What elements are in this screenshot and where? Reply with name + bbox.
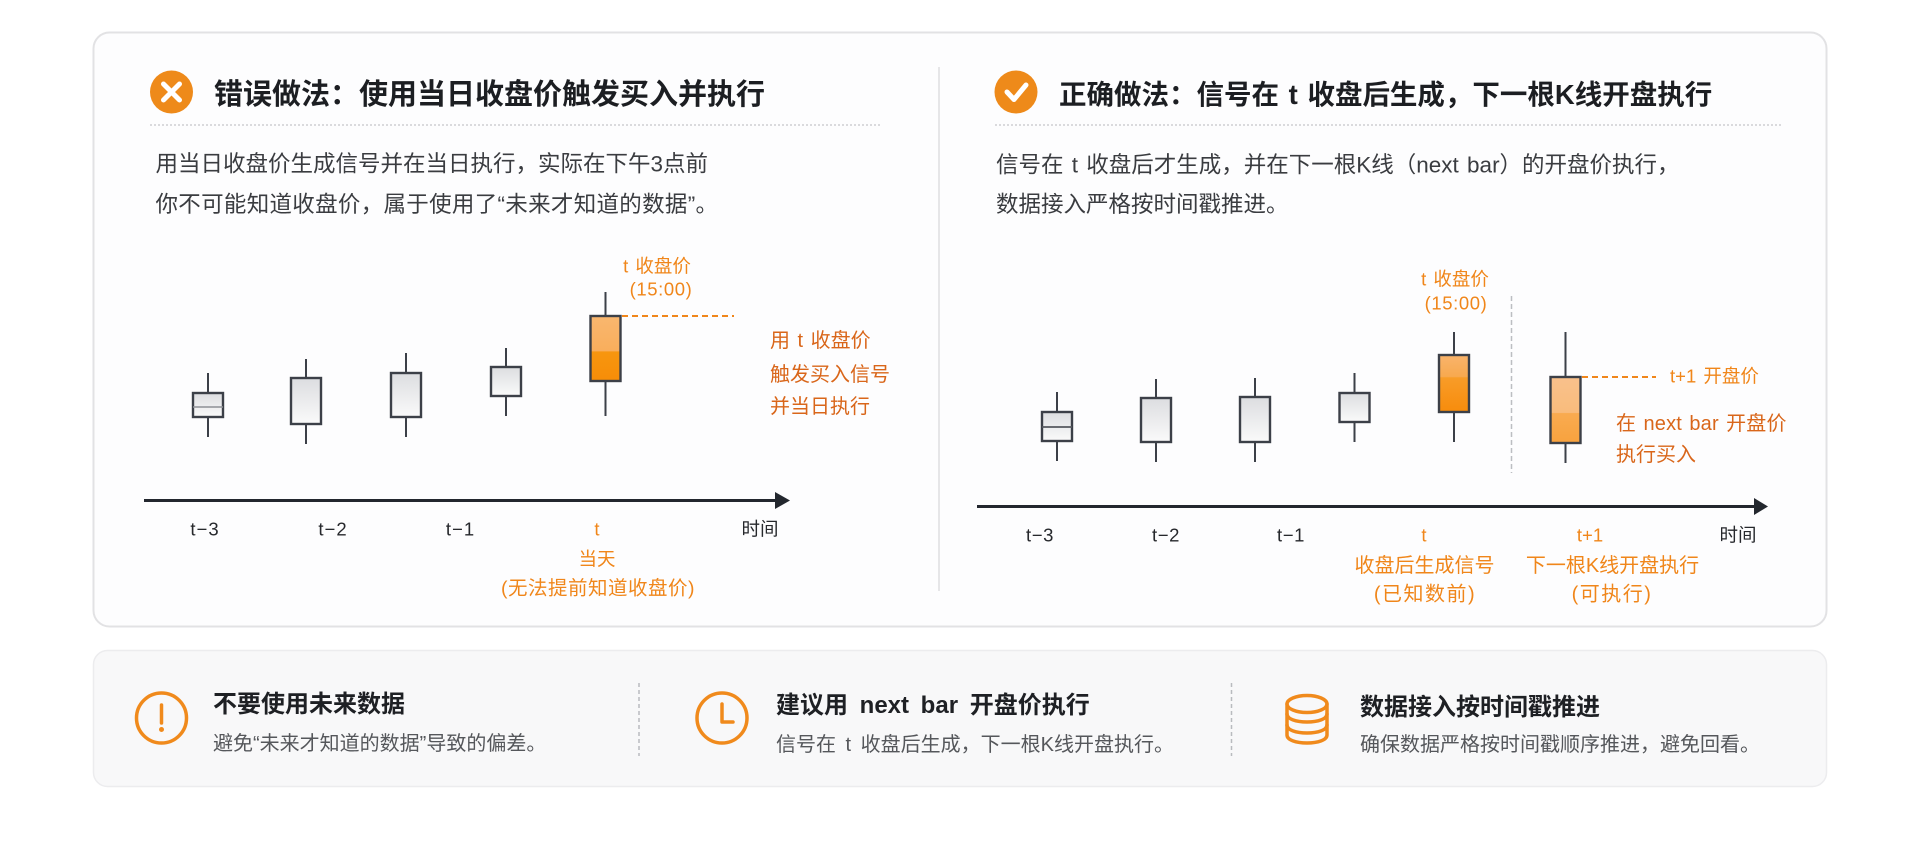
callout: next bar execution: 执行买入 <box>1616 443 1696 466</box>
close price guide <box>622 315 734 317</box>
callout: buy signal: 触发买入信号 <box>770 363 890 386</box>
axis labels: t−1 <box>446 518 475 540</box>
open price guide <box>1582 376 1656 378</box>
icon: warning <box>136 693 186 743</box>
arrow: time axis <box>977 498 1768 515</box>
text block: correct approach description: 信号在 t 收盘后才生成，并在下一根K线（next bar）的开盘价执行， <box>996 152 1680 178</box>
axis labels: t <box>1421 524 1427 546</box>
callout: buy signal: 用 t 收盘价 <box>770 329 871 352</box>
panel: recommendations <box>94 650 1826 786</box>
item: no future data <box>136 691 546 755</box>
text block: wrong approach description: 你不可能知道收盘价，属于使用了“未来才知道的数据”。 <box>156 192 718 217</box>
text block: wrong approach description: 用当日收盘价生成信号并在当日执行，实际在下午3点前 <box>156 152 708 176</box>
callout: buy signal <box>770 329 890 418</box>
description: 确保数据严格按时间戳顺序推进，避免回看。 <box>1360 733 1760 756</box>
axis labels: t+1 <box>1577 524 1603 546</box>
panel: wrong approach <box>144 70 890 600</box>
axis labels: 收盘后生成信号 <box>1354 554 1494 577</box>
candle t highlighted <box>1439 332 1469 442</box>
axis labels: (已知数前) <box>1374 582 1476 606</box>
label: t close price: t 收盘价 <box>623 256 691 276</box>
icon: cross <box>150 70 193 114</box>
chart: correct approach candlesticks <box>977 268 1787 606</box>
heading: correct approach: 正确做法：信号在 t 收盘后生成，下一根K线开盘执行 <box>1059 79 1712 110</box>
candle extra <box>1340 373 1370 442</box>
description: 避免“未来才知道的数据”导致的偏差。 <box>213 732 546 755</box>
candle t-1 <box>1240 378 1270 462</box>
label: t close price: (15:00) <box>630 278 692 300</box>
callout: next bar execution: 在 next bar 开盘价 <box>1616 412 1787 435</box>
axis labels: 时间 <box>1719 524 1757 546</box>
label: t close price: (15:00) <box>1425 292 1487 314</box>
separator between t and t+1 <box>1510 296 1512 473</box>
candle t-1 <box>391 353 421 437</box>
axis labels: (无法提前知道收盘价) <box>501 578 695 600</box>
axis labels: t−2 <box>318 518 348 540</box>
candle t highlighted <box>590 292 620 416</box>
axis labels: t−2 <box>1152 524 1180 546</box>
text block: correct approach description <box>996 152 1680 217</box>
candle t+1 highlighted <box>1550 332 1580 463</box>
candle t-3 <box>193 373 223 437</box>
heading: 数据接入按时间戳推进 <box>1360 694 1600 721</box>
axis labels: t−1 <box>1277 524 1305 546</box>
text block: wrong approach description <box>156 152 718 217</box>
heading: 不要使用未来数据 <box>213 691 405 718</box>
item: timestamp order <box>1287 694 1760 756</box>
callout: buy signal: 并当日执行 <box>770 395 870 418</box>
description: 信号在 t 收盘后生成，下一根K线开盘执行。 <box>776 733 1174 756</box>
axis labels: (可执行) <box>1572 582 1652 606</box>
icon: clock <box>697 693 747 743</box>
panel: comparison card <box>94 32 1826 626</box>
axis labels: t−3 <box>1026 524 1054 546</box>
axis labels: 时间 <box>741 518 779 540</box>
label: t+1 open price: t+1 开盘价 <box>1670 366 1759 386</box>
axis labels: 下一根K线开盘执行 <box>1526 554 1699 577</box>
heading: 建议用 next bar 开盘价执行 <box>776 692 1090 719</box>
chart: wrong approach candlesticks <box>144 256 890 600</box>
axis labels <box>190 518 779 600</box>
candle extra <box>491 348 521 416</box>
label: t close price <box>1421 268 1489 314</box>
axis labels <box>1026 524 1757 606</box>
item: next bar open <box>697 692 1174 756</box>
axis labels: t−3 <box>190 518 220 540</box>
icon: check <box>994 70 1038 114</box>
panel: correct approach <box>977 70 1787 606</box>
icon: database <box>1287 696 1327 743</box>
heading: wrong approach: 错误做法：使用当日收盘价触发买入并执行 <box>214 78 765 111</box>
label: t close price: t 收盘价 <box>1421 268 1489 290</box>
label: t close price <box>623 256 692 300</box>
axis labels: 当天 <box>578 548 616 570</box>
text block: correct approach description: 数据接入严格按时间戳推进。 <box>996 192 1289 217</box>
axis labels: t <box>594 518 600 540</box>
candle t-2 <box>1141 379 1171 462</box>
candle t-3 <box>1042 392 1072 461</box>
candle t-2 <box>291 359 321 444</box>
arrow: time axis <box>144 492 790 509</box>
callout: next bar execution <box>1616 412 1787 466</box>
